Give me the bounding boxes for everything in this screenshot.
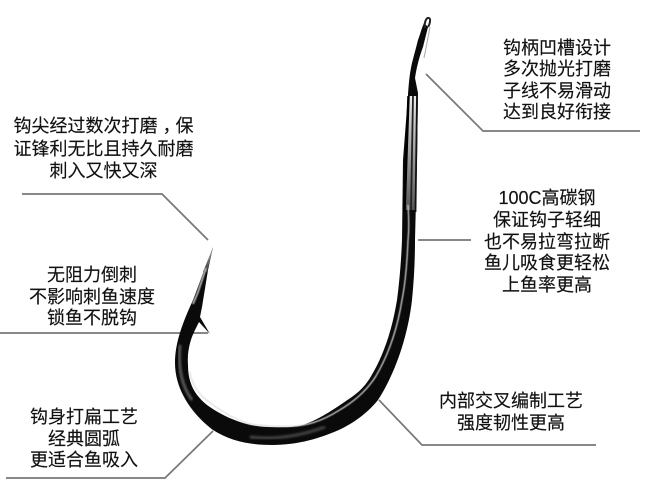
leader line: body: [379, 400, 596, 445]
text: high carbon steel: 保证钩子轻细: [493, 210, 601, 230]
leader line: point: [22, 194, 208, 240]
shank and inner bend highlight: [190, 205, 409, 426]
text: hook eye groove: 子线不易滑动: [503, 81, 611, 101]
text: hook point: 钩尖经过数次打磨 ，保: [14, 116, 194, 136]
leader line: hook eye: [426, 74, 640, 131]
point highlight: [193, 268, 206, 304]
leader line: shank: [418, 239, 471, 241]
text: bend: [30, 407, 138, 470]
text: high carbon steel: 100C高碳钢: [498, 188, 596, 208]
text: barb: 不影响刺鱼速度: [29, 287, 155, 307]
eye curl: [425, 18, 430, 28]
shank inner edge: [404, 96, 408, 212]
text: hook eye groove: 达到良好衔接: [503, 102, 611, 122]
text: high carbon steel: [484, 188, 610, 295]
text: hook point: [14, 116, 194, 181]
text: hook point: 证锋利无比且持久耐磨: [14, 139, 194, 159]
left bend sheen: [179, 345, 192, 400]
text: barb: 锁鱼不脱钩: [47, 308, 137, 328]
text: hook point: 刺入又快又深: [50, 161, 158, 181]
text: bend: 更适合鱼吸入: [30, 450, 138, 470]
text: barb: [29, 265, 155, 328]
text: high carbon steel: 也不易拉弯拉断: [484, 232, 610, 252]
text: high carbon steel: 鱼儿吸食更轻松: [484, 253, 610, 273]
eye outline: [424, 27, 430, 58]
icon: fish hook: [175, 18, 430, 445]
shank upper dark line: [411, 96, 413, 210]
text: hook eye groove: [503, 38, 611, 122]
shank outer edge: [416, 96, 417, 212]
leader line: bend: [6, 431, 213, 478]
text: weaving process: [439, 391, 583, 433]
text: bend: 经典圆弧: [48, 429, 120, 449]
text: barb: 无阻力倒刺: [47, 265, 137, 285]
lower bend sheen: [250, 427, 325, 438]
text: high carbon steel: 上鱼率更高: [502, 275, 592, 295]
text: bend: 钩身打扁工艺: [30, 407, 138, 427]
leader line: barb: [0, 332, 208, 334]
text: hook eye groove: 多次抛光打磨: [503, 59, 611, 79]
shank upper highlight: [405, 96, 417, 210]
point sheen: [203, 247, 213, 272]
text: weaving process: 强度韧性更高: [457, 413, 565, 433]
text: hook eye groove: 钩柄凹槽设计: [503, 38, 611, 58]
text: weaving process: 内部交叉编制工艺: [439, 391, 583, 411]
